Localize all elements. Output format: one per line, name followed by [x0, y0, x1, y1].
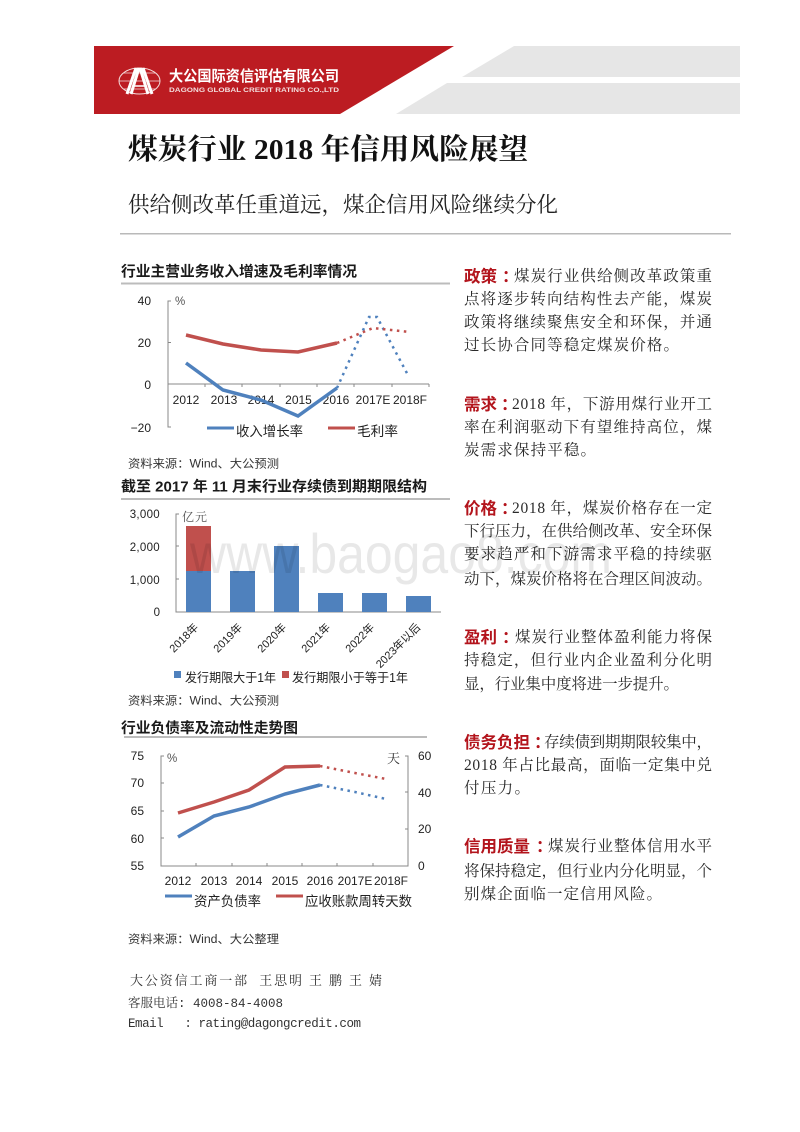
panel: leverage and liquidity: [121, 719, 432, 946]
text block: debt burden: 2018 年占比最高，面临一定集中兑: [464, 755, 712, 774]
legend: 毛利率: [357, 423, 398, 439]
text block: policy: [464, 266, 712, 354]
text block: policy: 点将逐步转向结构性去产能，煤炭: [464, 290, 712, 308]
line chart: revenue growth and margin: 2017E: [356, 393, 390, 407]
line chart: revenue growth and margin: 2014: [248, 393, 275, 407]
bar chart: maturity by year: 2018年: [166, 620, 201, 655]
text block: credit quality: 别煤企面临一定信用风险。: [464, 885, 662, 903]
title: 煤炭行业 2018 年信用风险展望: [127, 133, 528, 166]
line chart: debt ratio and receivable days: %: [167, 753, 177, 765]
source note: 资料来源：Wind、大公预测: [128, 456, 279, 470]
contact block: 大公资信工商一部 王思明 王 鹏 王 婧: [130, 973, 382, 988]
bar chart: maturity by year: 亿元: [182, 510, 207, 524]
text block: debt burden: 债务负担: [464, 734, 530, 752]
bar chart: maturity by year: 0: [154, 607, 160, 619]
line chart: debt ratio and receivable days: 2013: [201, 874, 228, 888]
line chart: debt ratio and receivable days: 2017E: [338, 874, 372, 888]
line chart: debt ratio and receivable days: 天: [387, 751, 400, 766]
text block: policy: 煤炭行业供给侧改革政策重: [514, 266, 712, 285]
text block: price: ：: [501, 500, 518, 518]
heading: leverage: 行业负债率及流动性走势图: [121, 719, 298, 737]
source note: 资料来源：Wind、大公整理: [128, 932, 280, 946]
line chart: debt ratio and receivable days: 2016: [307, 874, 334, 888]
text block: debt burden: 付压力。: [464, 779, 530, 797]
legend: [207, 423, 398, 439]
line chart: debt ratio and receivable days: 2014: [236, 874, 263, 888]
bar chart: maturity by year: 2023年以后: [373, 620, 423, 671]
bar chart: maturity by year: [130, 509, 441, 685]
text block: price: 动下，煤炭价格将在合理区间波动。: [464, 570, 712, 588]
text block: profitability: [464, 627, 712, 693]
company name english: DAGONG GLOBAL CREDIT RATING CO.,LTD: [169, 87, 339, 94]
line chart: revenue growth and margin: 2018F: [393, 393, 427, 407]
text block: price: 下行压力，在供给侧改革、安全环保: [464, 521, 712, 540]
text block: profitability: ：: [502, 629, 518, 647]
text block: demand: [464, 394, 712, 459]
line chart: revenue growth and margin: 20: [138, 336, 151, 350]
line chart: revenue growth and margin: %: [175, 296, 185, 308]
contact block: [128, 973, 382, 1031]
text block: price: 2018 年，煤炭价格存在一定: [512, 498, 712, 517]
company name: 大公国际资信评估有限公司: [169, 67, 339, 85]
line chart: revenue growth and margin: 2012: [173, 393, 200, 407]
legend: [165, 893, 412, 909]
line chart: debt ratio and receivable days: 75: [131, 749, 144, 763]
text block: debt burden: ：: [534, 734, 550, 752]
line chart: revenue growth and margin: [131, 294, 429, 439]
text block: policy: 过长协合同等稳定煤炭价格。: [464, 336, 679, 354]
text block: price: 价格: [464, 500, 497, 518]
line chart: debt ratio and receivable days: 20: [418, 822, 432, 836]
text block: demand: 需求: [464, 396, 497, 414]
line chart: revenue growth and margin: 2015: [285, 393, 312, 407]
panel: debt maturity structure: [121, 478, 450, 708]
legend: [174, 670, 408, 685]
line chart: revenue growth and margin: 2013: [211, 393, 238, 407]
legend: 收入增长率: [236, 423, 303, 439]
text block: profitability: 煤炭行业整体盈利能力将保: [515, 627, 712, 646]
text block: demand: ：: [501, 396, 518, 414]
text block: credit quality: 将保持稳定，但行业内分化明显，个: [464, 862, 712, 880]
subtitle: 供给侧改革任重道远，煤企信用风险继续分化: [128, 193, 558, 218]
text block: credit quality: 煤炭行业整体信用水平: [548, 836, 712, 855]
bar chart: maturity by year: 2,000: [130, 542, 160, 554]
text block: debt burden: 存续债到期期限较集中，: [544, 733, 712, 751]
line chart: debt ratio and receivable days: 55: [131, 859, 144, 873]
text block: profitability: 盈利: [464, 629, 497, 647]
text block: policy: 政策: [464, 268, 497, 286]
bar chart: maturity by year: 1,000: [130, 575, 160, 587]
line chart: debt ratio and receivable days: 2018F: [374, 874, 408, 888]
bar chart: maturity by year: 2022年: [342, 620, 377, 655]
text block: demand: 炭需求保持平稳。: [464, 441, 596, 459]
legend: 应收账款周转天数: [305, 893, 412, 909]
text block: debt burden: [464, 733, 712, 797]
legend: 发行期限小于等于1年: [292, 670, 408, 685]
line chart: debt ratio and receivable days: 60: [418, 749, 432, 763]
heading: revenue chart: 行业主营业务收入增速及毛利率情况: [121, 262, 358, 280]
watermark: www.baogao8.com: [189, 522, 612, 585]
panel: revenue growth and gross margin: [121, 262, 450, 470]
line chart: revenue growth and margin: 2016: [323, 393, 350, 407]
line chart: revenue growth and margin: 0: [144, 378, 151, 392]
text block: demand: 率在利润驱动下有望维持高位，煤: [464, 417, 712, 436]
line chart: revenue growth and margin: 40: [138, 294, 151, 308]
heading: debt maturity: 截至 2017 年 11 月末行业存续债到期期限结构: [121, 478, 427, 496]
line chart: debt ratio and receivable days: [131, 749, 432, 909]
text block: credit quality: ：: [536, 838, 552, 856]
contact block: Email : rating@dagongcredit.com: [128, 1017, 361, 1031]
text block: policy: 政策将继续聚焦安全和环保，并通: [464, 313, 712, 331]
text block: demand: 2018 年，下游用煤行业开工: [512, 394, 712, 413]
line chart: revenue growth and margin: −20: [131, 421, 151, 435]
line chart: debt ratio and receivable days: 60: [131, 832, 144, 846]
bar chart: maturity by year: 2021年: [298, 620, 333, 655]
header banner: [94, 46, 740, 114]
icon: company logo: [119, 68, 160, 94]
bar chart: maturity by year: 2019年: [210, 620, 245, 655]
line chart: debt ratio and receivable days: 0: [418, 859, 425, 873]
line chart: debt ratio and receivable days: 2015: [272, 874, 299, 888]
bar chart: maturity by year: 3,000: [130, 509, 160, 521]
text block: policy: ：: [502, 268, 518, 286]
text block: price: 要求趋严和下游需求平稳的持续驱: [464, 545, 712, 563]
text block: credit quality: 信用质量: [464, 838, 530, 856]
text block: credit quality: [464, 836, 712, 903]
legend: 资产负债率: [194, 893, 261, 909]
line chart: debt ratio and receivable days: 70: [131, 776, 144, 790]
source note: 资料来源：Wind、大公预测: [128, 694, 279, 708]
text block: profitability: 显，行业集中度将进一步提升。: [464, 674, 679, 693]
text block: price: [464, 498, 712, 588]
line chart: debt ratio and receivable days: 65: [131, 804, 144, 818]
bar chart: maturity by year: 2020年: [254, 620, 289, 655]
line chart: debt ratio and receivable days: 2012: [165, 874, 192, 888]
contact block: 客服电话: 4008-84-4008: [128, 995, 283, 1011]
legend: 发行期限大于1年: [185, 670, 276, 685]
line chart: debt ratio and receivable days: 40: [418, 786, 432, 800]
text block: profitability: 持稳定，但行业内企业盈利分化明: [464, 651, 712, 669]
